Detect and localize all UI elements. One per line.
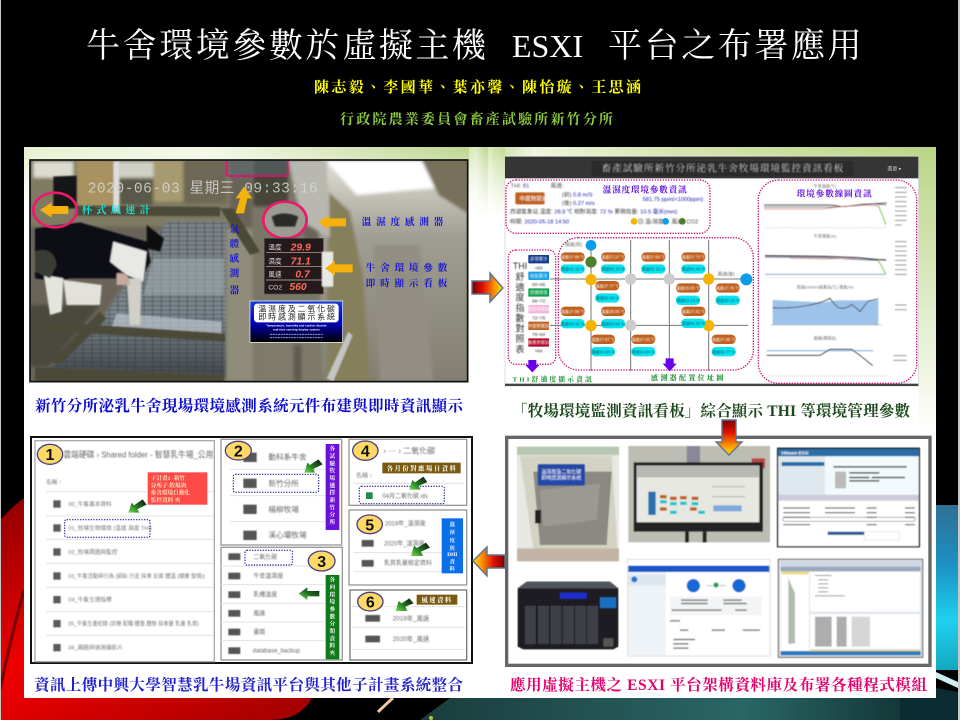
arrow: THI display bbox=[525, 360, 539, 372]
folder screenshot 1: 雲端硬碟 › Shared folder - 智慧乳牛場_公用 bbox=[63, 450, 213, 460]
brick floor texture bbox=[50, 222, 227, 376]
note: sub-project folder: 子計畫1 -新竹 bbox=[151, 474, 185, 482]
LED display board: CO2 bbox=[268, 284, 282, 291]
block: sensor layout map: 濕度92.77 % bbox=[712, 348, 736, 354]
screenshot: ESXi console: VMware ESXi bbox=[781, 450, 808, 455]
system sign: 溫濕度及二氧化碳 bbox=[258, 304, 335, 314]
block: THI comfort index table: 指 bbox=[516, 302, 525, 313]
rails bbox=[35, 162, 353, 382]
LED display board: 風速 bbox=[268, 270, 282, 279]
folder screenshot 3: 數 bbox=[330, 612, 336, 620]
folder screenshot 5: 與 bbox=[450, 544, 456, 552]
block: environment line charts: 牛舍濕度(%) bbox=[814, 232, 837, 238]
folder screenshot 2: 牧 bbox=[330, 467, 336, 475]
folder screenshot 1: 03_牛隻活動與行為 (飼臥 行走 採食 反芻 體溫 (健康 發情)) bbox=[68, 572, 205, 580]
folder screenshot 2: 動科系牛舍 bbox=[268, 451, 307, 461]
block: sensor layout map: 風速(前) bbox=[565, 241, 583, 248]
pill readings: 溫度27.83 ℃ bbox=[631, 336, 655, 342]
title: 平台之布署應用 bbox=[608, 27, 864, 65]
label: gas sensor: 測 bbox=[230, 267, 240, 279]
pill readings: 溫度27.66 ℃ bbox=[641, 254, 665, 260]
authors: 陳志毅、李國華、葉亦馨、陳怡璇、王思涵 bbox=[314, 78, 641, 96]
caption: ESXI server: 應用虛擬主機之 ESXI 平台架構資料庫及布署各種程式模組 bbox=[510, 675, 927, 694]
title: ESXI bbox=[512, 28, 583, 64]
photo: server cabinet: 即時感測顯示系統 bbox=[541, 474, 581, 481]
folder screenshot 4 bbox=[349, 439, 467, 505]
folder screenshot 5: 料 bbox=[450, 565, 456, 573]
folder screenshot 1: 01_牧場生物環境 (溫度 濕度 THI) bbox=[68, 524, 152, 532]
block: THI comfort index table: 舒 bbox=[516, 271, 525, 282]
badge 1 bbox=[37, 444, 63, 464]
screenshot: SQL database manager bbox=[778, 559, 923, 657]
folder screenshot 6: 2020年_風速 bbox=[393, 634, 430, 643]
concrete pillar bbox=[226, 160, 330, 382]
folder screenshot 2: 楊柳牧場 bbox=[268, 504, 299, 514]
label: THI display: THI舒適度顯示資訊 bbox=[513, 374, 592, 383]
block: THI comfort index table: 輕度熱緊迫 bbox=[528, 306, 550, 313]
label: gas sensor: 體 bbox=[230, 238, 240, 250]
folder screenshot 2: 新竹分所 bbox=[268, 478, 299, 488]
block: sensor layout map: 濕度91.13 % bbox=[561, 266, 585, 272]
folder screenshot 6 bbox=[350, 590, 467, 660]
block: temperature and humidity info: THI: 81 bbox=[511, 184, 529, 190]
folder screenshot 2: 場 bbox=[330, 474, 336, 482]
marker: temperature sensor circle bbox=[263, 202, 307, 238]
arrow: sensor map bbox=[663, 358, 677, 371]
pill readings: 溫度27.27 ℃ bbox=[601, 254, 625, 260]
folder screenshot 6: 2019年_風速 bbox=[393, 614, 430, 623]
LED display board: 560 bbox=[289, 282, 307, 293]
folder screenshot 3: 乳槽溫度 bbox=[253, 591, 277, 599]
folder screenshot 2: 驗 bbox=[329, 459, 336, 467]
folder screenshot 5 bbox=[349, 510, 467, 585]
arrow: anemometer bbox=[40, 202, 68, 218]
photo: server cabinet bbox=[517, 447, 619, 561]
cow bbox=[35, 176, 164, 325]
pill readings: 溫度27.89 ℃ bbox=[561, 254, 585, 260]
folder screenshot 2: 擇 bbox=[330, 489, 336, 497]
arrow: photo to dashboard bbox=[472, 273, 503, 302]
label: anemometer: 杯式風速計 bbox=[82, 203, 150, 216]
arrow: gas sensor bbox=[236, 187, 252, 213]
pill readings: 溫度28.00 ℃ bbox=[676, 285, 700, 291]
folder screenshot 4: 4 bbox=[361, 444, 370, 461]
folder screenshot 2: 竹 bbox=[330, 503, 336, 511]
folder screenshot 5: 資 bbox=[450, 557, 456, 565]
chart: barn temperature bbox=[764, 203, 887, 228]
pill readings: 溫度27.75 ℃ bbox=[716, 285, 740, 291]
screenshot: ESXi console bbox=[778, 448, 919, 547]
folder screenshot 5: 乳質乳量檢定資料 bbox=[384, 559, 432, 567]
folder screenshot 3: 資 bbox=[330, 634, 336, 642]
folder screenshot 6: 風速資料 bbox=[421, 595, 452, 604]
block: sensor layout map: 濕度93.38 % bbox=[596, 295, 619, 301]
folder screenshot 5: 度 bbox=[450, 536, 456, 544]
note: sub-project folder: 監控資料 夾 bbox=[151, 496, 181, 504]
folder screenshot 1: 名稱 ↑ bbox=[46, 478, 62, 486]
chart: barn humidity bbox=[765, 256, 887, 278]
block: temperature and humidity info: (後) 0.27 m/s bbox=[562, 199, 595, 207]
block: THI comfort index table: 非常寒冷 bbox=[530, 256, 548, 263]
note: sub-project folder: 分所子-牧場與 bbox=[151, 481, 188, 489]
pill readings: 溫度27.97 ℃ bbox=[591, 336, 615, 342]
block: sensor layout map: 濕度94.20 % bbox=[682, 320, 705, 326]
folder screenshot 3 bbox=[221, 547, 342, 660]
folder screenshot 3: 夾 bbox=[330, 649, 336, 657]
pill readings: 溫度27.77 ℃ bbox=[595, 282, 619, 288]
folder screenshot 3: database_backup bbox=[253, 648, 301, 654]
folder screenshot 3: 參 bbox=[330, 605, 336, 613]
folder screenshot 1: 00_牛隻基本資料 bbox=[68, 500, 112, 508]
folder screenshot 5: 溫 bbox=[450, 520, 456, 528]
main white panel bbox=[24, 147, 936, 698]
block: environment line charts: 風速(環境站) bbox=[814, 334, 837, 340]
block: THI comfort index table: THI bbox=[513, 261, 527, 271]
screenshot: web management UI bbox=[628, 559, 770, 656]
folder screenshot 5: 2019年_溫濕度 bbox=[385, 520, 426, 528]
block: THI comfort index table: 對 bbox=[516, 323, 525, 334]
label: temperature sensor: 溫濕度感測器 bbox=[362, 216, 444, 228]
label: gas sensor: 氣 bbox=[230, 223, 240, 235]
block: temperature and humidity info: 溫濕度環境參數資訊 bbox=[603, 183, 687, 194]
marker: gas sensor box bbox=[226, 160, 288, 177]
folder screenshot 1: 02_牧場周圍與監控 bbox=[68, 548, 118, 556]
timestamp overlay: 2020-06-03 星期三 09:33:16 bbox=[88, 179, 318, 197]
block: THI comfort index table: 數 bbox=[516, 312, 525, 323]
block: sensor layout map: 濕度95.10 % bbox=[601, 266, 625, 272]
folder screenshot 2: 新 bbox=[330, 496, 336, 504]
badge 1: 1 bbox=[46, 447, 55, 464]
arrow: server to data platform bbox=[473, 547, 505, 576]
block: sensor layout map: 濕度92.13 % bbox=[676, 297, 700, 303]
pill readings: 溫度27.73 ℃ bbox=[681, 254, 705, 260]
folder screenshot 3: 分 bbox=[330, 620, 336, 628]
system sign: real-time sensing display system bbox=[273, 327, 320, 331]
block: temperature and humidity info: 時間: 2020-05-18 14:50 bbox=[510, 217, 569, 225]
folder screenshot 2: 溪心壩牧場 bbox=[268, 530, 307, 540]
pill readings bbox=[561, 254, 740, 342]
title: 牛舍環境參數於虛擬主機 bbox=[86, 27, 489, 65]
block: THI comfort index table: 適 bbox=[516, 281, 525, 292]
block: THI comfort index table: 72~78 bbox=[532, 315, 546, 320]
panel: data platform folders bbox=[31, 437, 472, 663]
note: sub-project folder bbox=[148, 472, 207, 505]
folder screenshot 4: 各月份對應場日資料 bbox=[387, 463, 457, 472]
block: sensor layout map: 濕度94.94 % bbox=[601, 320, 625, 326]
dashboard header bar bbox=[505, 157, 918, 178]
block: sensor layout map: 濕度92.13 % bbox=[642, 266, 665, 272]
LED display board: 71.1 bbox=[291, 256, 311, 267]
marker: anemometer circle bbox=[33, 193, 77, 227]
folder screenshot 2: 各 bbox=[330, 445, 336, 453]
block: THI comfort index table: <60 bbox=[535, 265, 543, 270]
block: sensor layout map: 風速(後) bbox=[718, 271, 735, 278]
block: THI comfort index table: 有些寒冷 bbox=[530, 272, 548, 279]
block: THI comfort index table: 表 bbox=[516, 343, 525, 354]
block: environment line charts: 環境參數線圖資訊 bbox=[797, 188, 872, 199]
arrow: display board bbox=[325, 261, 353, 276]
system sign: Temperature, humidity and carbon dioxide bbox=[266, 323, 327, 327]
block: THI comfort index table: 舒適環境 bbox=[530, 289, 548, 296]
LED display board: 29.9 bbox=[290, 242, 311, 253]
folder screenshot 3: 類 bbox=[330, 627, 336, 635]
folder screenshot 2: 2 bbox=[234, 444, 243, 461]
folder screenshot 6: 6 bbox=[366, 595, 375, 612]
block: environment line charts: 牛舍溫度(℃) bbox=[814, 182, 837, 188]
label: display board: 牛舍環境參數 bbox=[366, 262, 448, 274]
label: gas sensor: 感 bbox=[230, 253, 240, 265]
arrow: to folder 01 bbox=[128, 499, 147, 513]
block: sensor layout map bbox=[550, 238, 753, 371]
block: sensor layout map: 濕度94.32 % bbox=[561, 320, 585, 326]
chart: wind speed bbox=[767, 349, 887, 376]
folder screenshot 4: 名稱 ↑ bbox=[356, 471, 373, 479]
folder screenshot 5: 2020年_溫濕度 bbox=[384, 539, 425, 547]
label: display board: 即時顯示看板 bbox=[366, 278, 448, 290]
block: temperature and humidity info: 風速: bbox=[551, 182, 564, 190]
folder screenshot 2: 試 bbox=[330, 452, 336, 460]
folder screenshot 1: 05_牛隻生產紀錄 (診療 配種 體重 體態 採食量 乳量 乳質) bbox=[68, 620, 199, 628]
caption: data platform: 資訊上傳中興大學智慧乳牛場資訊平台與其他子計畫系統整合 bbox=[34, 675, 463, 694]
block: temperature and humidity info: CO2 bbox=[687, 219, 698, 225]
photo: dashboard monitor bbox=[628, 446, 770, 542]
photo: NAS storage bbox=[518, 582, 618, 649]
folder screenshots 2 to 6 bbox=[221, 439, 467, 660]
block: temperature and humidity info: 風速 bbox=[672, 217, 683, 225]
block: THI comfort index table bbox=[508, 250, 556, 364]
pill readings: 溫度28.00 ℃ bbox=[601, 308, 625, 314]
block: temperature and humidity info: 中度熱緊迫 bbox=[519, 195, 548, 203]
affiliation: 行政院農業委員會畜產試驗所新竹分所 bbox=[340, 111, 613, 128]
panel: ESXI server bbox=[507, 437, 930, 665]
block: temperature and humidity info: 西湖氣象站 溫度: 28.9 ℃ 相對濕度: 72 % 累積雨量: 10.5 毫米(mm) bbox=[510, 207, 677, 215]
arrow: temperature sensor bbox=[318, 215, 346, 230]
system sign: 即時感測顯示系統 bbox=[258, 312, 335, 322]
pill readings: 溫度27.86 ℃ bbox=[561, 308, 585, 314]
label: gas sensor: 器 bbox=[230, 285, 240, 297]
folder screenshot 3: 風速 bbox=[253, 609, 265, 617]
note: sub-project folder: 畜舍環境自動化 bbox=[151, 489, 191, 497]
folder screenshot 3: 境 bbox=[330, 598, 336, 606]
folder screenshot 1: 06_踢圈與偵測攝影片 bbox=[68, 644, 123, 652]
block: THI comfort index table: >84 bbox=[535, 349, 543, 354]
system sign bbox=[250, 301, 343, 342]
block: temperature and humidity info: 溫/濕度 bbox=[645, 217, 664, 225]
folder screenshot 3: 向 bbox=[330, 583, 336, 591]
folder screenshot 3: 3 bbox=[317, 554, 326, 571]
label: sensor map: 感測器配置位址圖 bbox=[651, 373, 723, 382]
LED display board: 濕度 bbox=[268, 256, 282, 265]
dashboard header bar: 選單 ▾ bbox=[887, 166, 902, 173]
LED display board: 0.7 bbox=[295, 270, 311, 281]
LED display board: 溫度 bbox=[268, 242, 282, 251]
photo: server cabinet: 溫濕度及二氧化碳 bbox=[541, 468, 581, 475]
block: THI comfort index table: 度 bbox=[516, 292, 525, 303]
LED display board bbox=[264, 238, 333, 294]
folder screenshot 5: 溼 bbox=[450, 528, 456, 536]
folder screenshot 1: 04_牛隻生理指標 bbox=[68, 596, 112, 604]
arrow: dashboard to server bbox=[716, 420, 742, 455]
block: THI comfort index table: 66~72 bbox=[532, 299, 546, 304]
block: sensor layout map: 濕度94.46 % bbox=[682, 266, 705, 272]
pill readings: 溫度27.81 ℃ bbox=[681, 308, 705, 314]
pill readings: 溫度27.85 ℃ bbox=[712, 336, 736, 342]
block: temperature and humidity info: (前) 0.8 m/S bbox=[562, 191, 593, 199]
folder screenshot 4: › ··· › 二氧化碳 bbox=[383, 445, 435, 455]
folder screenshot 4: 04月二氧化碳.xls bbox=[382, 492, 428, 500]
block: environment line charts bbox=[758, 180, 917, 383]
humidity pills bbox=[561, 264, 740, 356]
caption: dashboard: 「牧場環境監測資訊看板」綜合顯示 THI 等環境管理參數 bbox=[512, 401, 910, 420]
folder screenshot 3: 二氧化碳 bbox=[253, 553, 277, 561]
caption: barn photo: 新竹分所泌乳牛舍現場環境感測系統元件布建與即時資訊顯示 bbox=[35, 396, 464, 415]
folder screenshot 1 bbox=[35, 441, 214, 662]
folder screenshot 3: 環 bbox=[330, 590, 336, 598]
folder screenshot 5: 5 bbox=[365, 517, 374, 534]
block: sensor layout map: 濕度93.18 % bbox=[716, 297, 740, 303]
block: environment line charts: 西湖(2391H)氣象站(℃)·濕度(%) bbox=[797, 283, 854, 289]
dashboard header bar: 畜產試驗所新竹分所泌乳牛舍牧場環境監控資訊看板 bbox=[602, 163, 844, 175]
folder screenshot 2: 所 bbox=[330, 518, 336, 526]
block: THI comfort index table: 78~84 bbox=[532, 332, 546, 337]
folder screenshot 3: 各 bbox=[330, 576, 336, 584]
block: sensor layout map: 濕度94.64 % bbox=[632, 348, 655, 354]
panel: monitoring dashboard bbox=[505, 157, 918, 386]
block: THI comfort index table: 嚴重熱緊迫 bbox=[528, 339, 550, 346]
chart: weather station bbox=[770, 298, 882, 325]
block: sensor layout map: 濕度93.00 % bbox=[591, 348, 615, 354]
folder screenshot 3: 牛舍溫濕度 bbox=[253, 572, 283, 580]
panel: barn sensor photo bbox=[30, 157, 468, 382]
folder screenshot 2: 分 bbox=[330, 511, 336, 519]
folder screenshot 3: 畫面 bbox=[253, 628, 265, 636]
block: THI comfort index table: 中度熱緊迫 bbox=[528, 322, 550, 329]
block: THI comfort index table: 照 bbox=[516, 334, 525, 344]
folder screenshot 3: 料 bbox=[330, 642, 336, 650]
block: temperature and humidity info bbox=[506, 180, 710, 233]
block: temperature and humidity info: 581.75 ppm(<1000ppm) bbox=[643, 197, 703, 203]
folder screenshot 2: 選 bbox=[330, 481, 337, 489]
block: THI comfort index table: 60~66 bbox=[532, 282, 546, 287]
folder screenshot 5: DHI bbox=[447, 552, 457, 558]
folder screenshot 2 bbox=[221, 439, 342, 545]
photo scenery bbox=[30, 160, 468, 382]
temperature pills bbox=[561, 252, 740, 344]
chart legends bbox=[893, 188, 907, 360]
